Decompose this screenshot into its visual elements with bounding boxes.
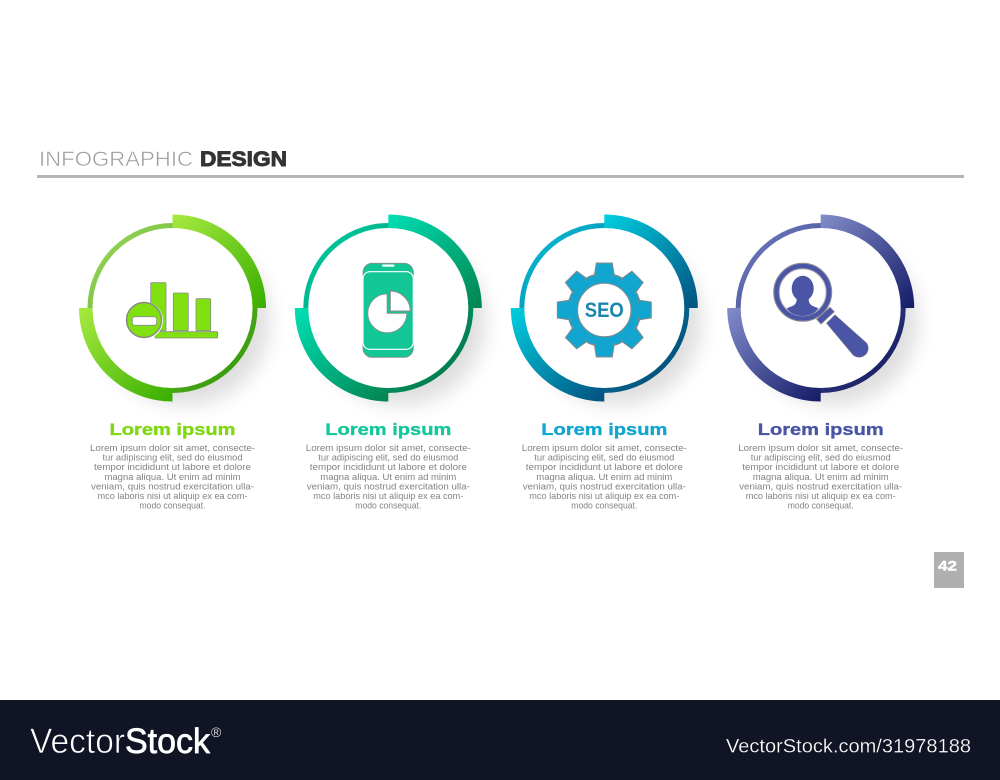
text block: modo consequat.: [788, 500, 854, 511]
text block: veniam, quis nostrud exercitation ulla-: [523, 480, 686, 491]
text block: Lorem ipsum dolor sit amet, consecte-: [90, 442, 255, 453]
heading: Lorem ipsum: [325, 420, 451, 439]
text block: mco laboris nisi ut aliquip ex ea com-: [746, 490, 896, 501]
text block: mco laboris nisi ut aliquip ex ea com-: [313, 490, 463, 501]
icon: bar chart with minus: [126, 283, 218, 339]
icon: phone with pie chart: [363, 263, 413, 357]
panel: chart: [79, 214, 270, 511]
icon: gear with SEO: SEO: [585, 299, 624, 322]
footer image id: VectorStock.com/31978188: [726, 736, 971, 758]
text block: tur adipiscing elit, sed do eiusmod: [751, 452, 891, 463]
text block: Lorem ipsum dolor sit amet, consecte-: [306, 442, 471, 453]
text block: veniam, quis nostrud exercitation ulla-: [307, 480, 470, 491]
text block: veniam, quis nostrud exercitation ulla-: [739, 480, 902, 491]
heading: Lorem ipsum: [110, 420, 236, 439]
text block: magna aliqua. Ut enim ad minim: [536, 471, 672, 482]
text block: tur adipiscing elit, sed do eiusmod: [534, 452, 674, 463]
footer bar: [0, 700, 1000, 780]
text block: tempor incididunt ut labore et dolore: [310, 461, 467, 472]
icon: magnifier with person: [774, 263, 868, 357]
page number badge: 42: [938, 558, 957, 574]
text block: modo consequat.: [355, 500, 421, 511]
title: DESIGN: [200, 148, 287, 171]
panel: SEO gear: [511, 214, 701, 511]
panel: phone: [295, 214, 485, 511]
text block: mco laboris nisi ut aliquip ex ea com-: [529, 490, 679, 501]
text block: tempor incididunt ut labore et dolore: [742, 461, 899, 472]
text block: [738, 442, 903, 511]
heading: Lorem ipsum: [541, 420, 667, 439]
text block: modo consequat.: [571, 500, 637, 511]
text block: tur adipiscing elit, sed do eiusmod: [318, 452, 458, 463]
text block: magna aliqua. Ut enim ad minim: [753, 471, 889, 482]
logo: VectorStock: Stock: [125, 722, 210, 761]
panel: people search: [727, 214, 918, 511]
logo: VectorStock: Vector: [30, 722, 125, 761]
text block: mco laboris nisi ut aliquip ex ea com-: [98, 490, 248, 501]
text block: magna aliqua. Ut enim ad minim: [104, 471, 241, 482]
heading: Lorem ipsum: [758, 420, 884, 439]
text block: veniam, quis nostrud exercitation ulla-: [91, 480, 254, 491]
text block: tempor incididunt ut labore et dolore: [526, 461, 683, 472]
text block: Lorem ipsum dolor sit amet, consecte-: [738, 442, 903, 453]
logo: VectorStock: ®: [211, 724, 222, 740]
ring: blue: [511, 214, 701, 405]
ring: teal: [295, 214, 485, 405]
text block: magna aliqua. Ut enim ad minim: [320, 471, 456, 482]
logo: VectorStock: [30, 722, 222, 761]
text block: tempor incididunt ut labore et dolore: [94, 461, 251, 472]
text block: tur adipiscing elit, sed do eiusmod: [102, 452, 242, 463]
text block: [306, 442, 471, 511]
text block: Lorem ipsum dolor sit amet, consecte-: [522, 442, 687, 453]
page number badge: [934, 552, 964, 588]
text block: modo consequat.: [140, 500, 206, 511]
title: [39, 148, 287, 171]
text block: [522, 442, 687, 511]
text block: [90, 442, 255, 511]
ring: green: [79, 214, 270, 405]
title: INFOGRAPHIC: [39, 148, 193, 171]
icon: gear with SEO: [557, 263, 651, 357]
ring: indigo: [727, 214, 918, 405]
